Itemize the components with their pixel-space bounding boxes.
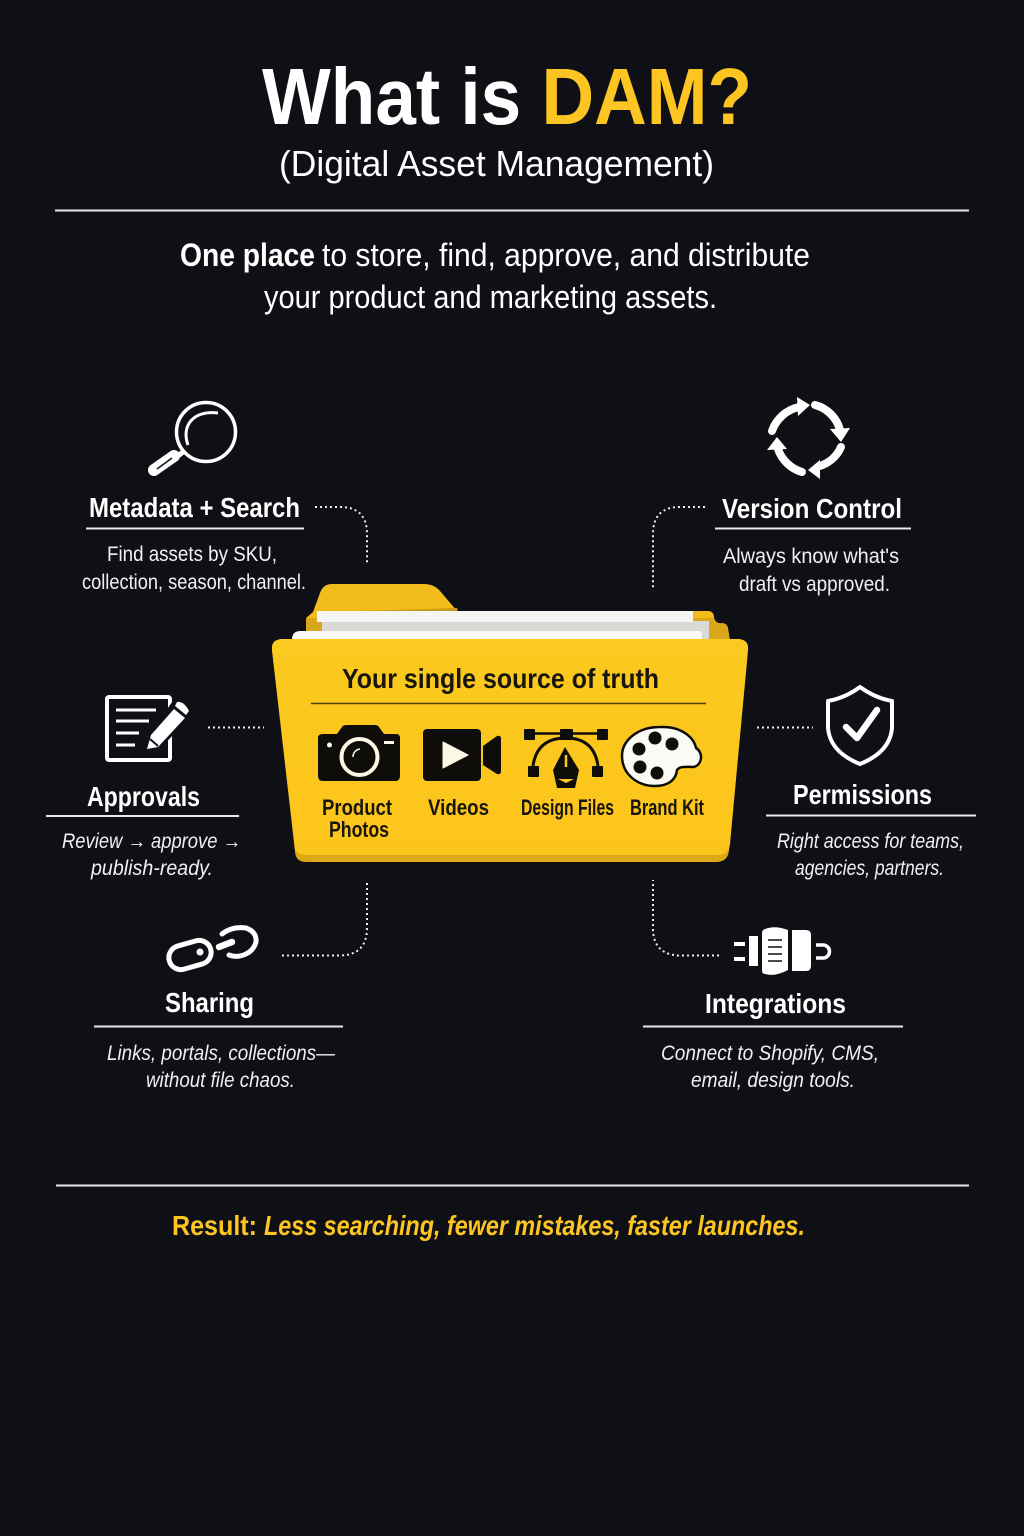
intro text: to store, find, approve, and distribute <box>322 237 810 273</box>
description: Connect to Shopify, CMS, <box>661 1042 879 1065</box>
arrow: sharing connector <box>282 880 367 956</box>
description: without file chaos. <box>146 1069 295 1092</box>
heading: Sharing <box>165 987 254 1018</box>
arrow: integrations connector <box>653 880 719 956</box>
icon: magnifying glass <box>154 402 236 470</box>
icon: camera <box>318 725 400 781</box>
arrow: permissions connector <box>757 726 813 728</box>
panel: version control <box>715 397 911 596</box>
description: Review → approve → <box>62 830 241 853</box>
description <box>777 830 964 880</box>
heading: Permissions <box>793 779 932 810</box>
description <box>723 545 899 596</box>
description: Right access for teams, <box>777 830 964 853</box>
description: Find assets by SKU, <box>107 543 277 566</box>
icon: plug connector <box>734 927 830 975</box>
heading: Approvals <box>87 781 200 812</box>
panel: integrations <box>643 927 903 1092</box>
icon: chain link <box>166 928 256 972</box>
heading: Integrations <box>705 988 846 1019</box>
result statement: Result: <box>172 1210 257 1241</box>
label: design files: Design Files <box>521 795 614 820</box>
intro text: your product and marketing assets. <box>264 279 717 315</box>
panel: approvals <box>46 697 241 880</box>
label: brand kit: Brand Kit <box>630 795 705 820</box>
panel: permissions <box>766 687 976 880</box>
arrow: version control connector <box>653 507 705 588</box>
panel: sharing <box>94 928 343 1092</box>
description: Always know what's <box>723 545 899 568</box>
label: product photos <box>322 795 393 842</box>
icon: paint palette <box>622 727 701 786</box>
description: publish-ready. <box>90 857 213 880</box>
arrow: approvals connector <box>208 726 264 728</box>
heading: Metadata + Search <box>89 492 300 523</box>
folder front <box>272 639 748 862</box>
arrow: metadata connector <box>315 507 367 565</box>
folder heading: Your single source of truth <box>342 663 659 694</box>
label: product photos: Product <box>322 795 393 820</box>
description: draft vs approved. <box>739 573 890 596</box>
icon: video camera <box>423 729 501 781</box>
icon: document and pencil <box>107 697 191 760</box>
folder back and tab <box>306 584 730 640</box>
icon: design pen tool <box>524 729 608 788</box>
icon: shield with check <box>828 687 892 764</box>
label: product photos: Photos <box>329 817 389 842</box>
title: What is DAM? <box>262 52 752 141</box>
intro text: One place <box>180 237 315 273</box>
description: collection, season, channel. <box>82 571 306 594</box>
description <box>107 1042 336 1092</box>
description: agencies, partners. <box>795 857 944 880</box>
intro text <box>180 237 810 315</box>
panel: yellow folder <box>272 584 748 862</box>
description <box>62 830 241 880</box>
description <box>82 543 306 594</box>
description: Links, portals, collections— <box>107 1042 336 1065</box>
panel: metadata + search <box>82 402 306 594</box>
description <box>661 1042 879 1092</box>
paper sheets <box>292 611 709 641</box>
icon: cycle arrows <box>767 397 850 479</box>
heading: Version Control <box>722 493 902 524</box>
description: email, design tools. <box>691 1069 855 1092</box>
result statement: Less searching, fewer mistakes, faster launches. <box>264 1210 805 1241</box>
label: videos: Videos <box>428 795 489 820</box>
subtitle: (Digital Asset Management) <box>279 143 714 184</box>
